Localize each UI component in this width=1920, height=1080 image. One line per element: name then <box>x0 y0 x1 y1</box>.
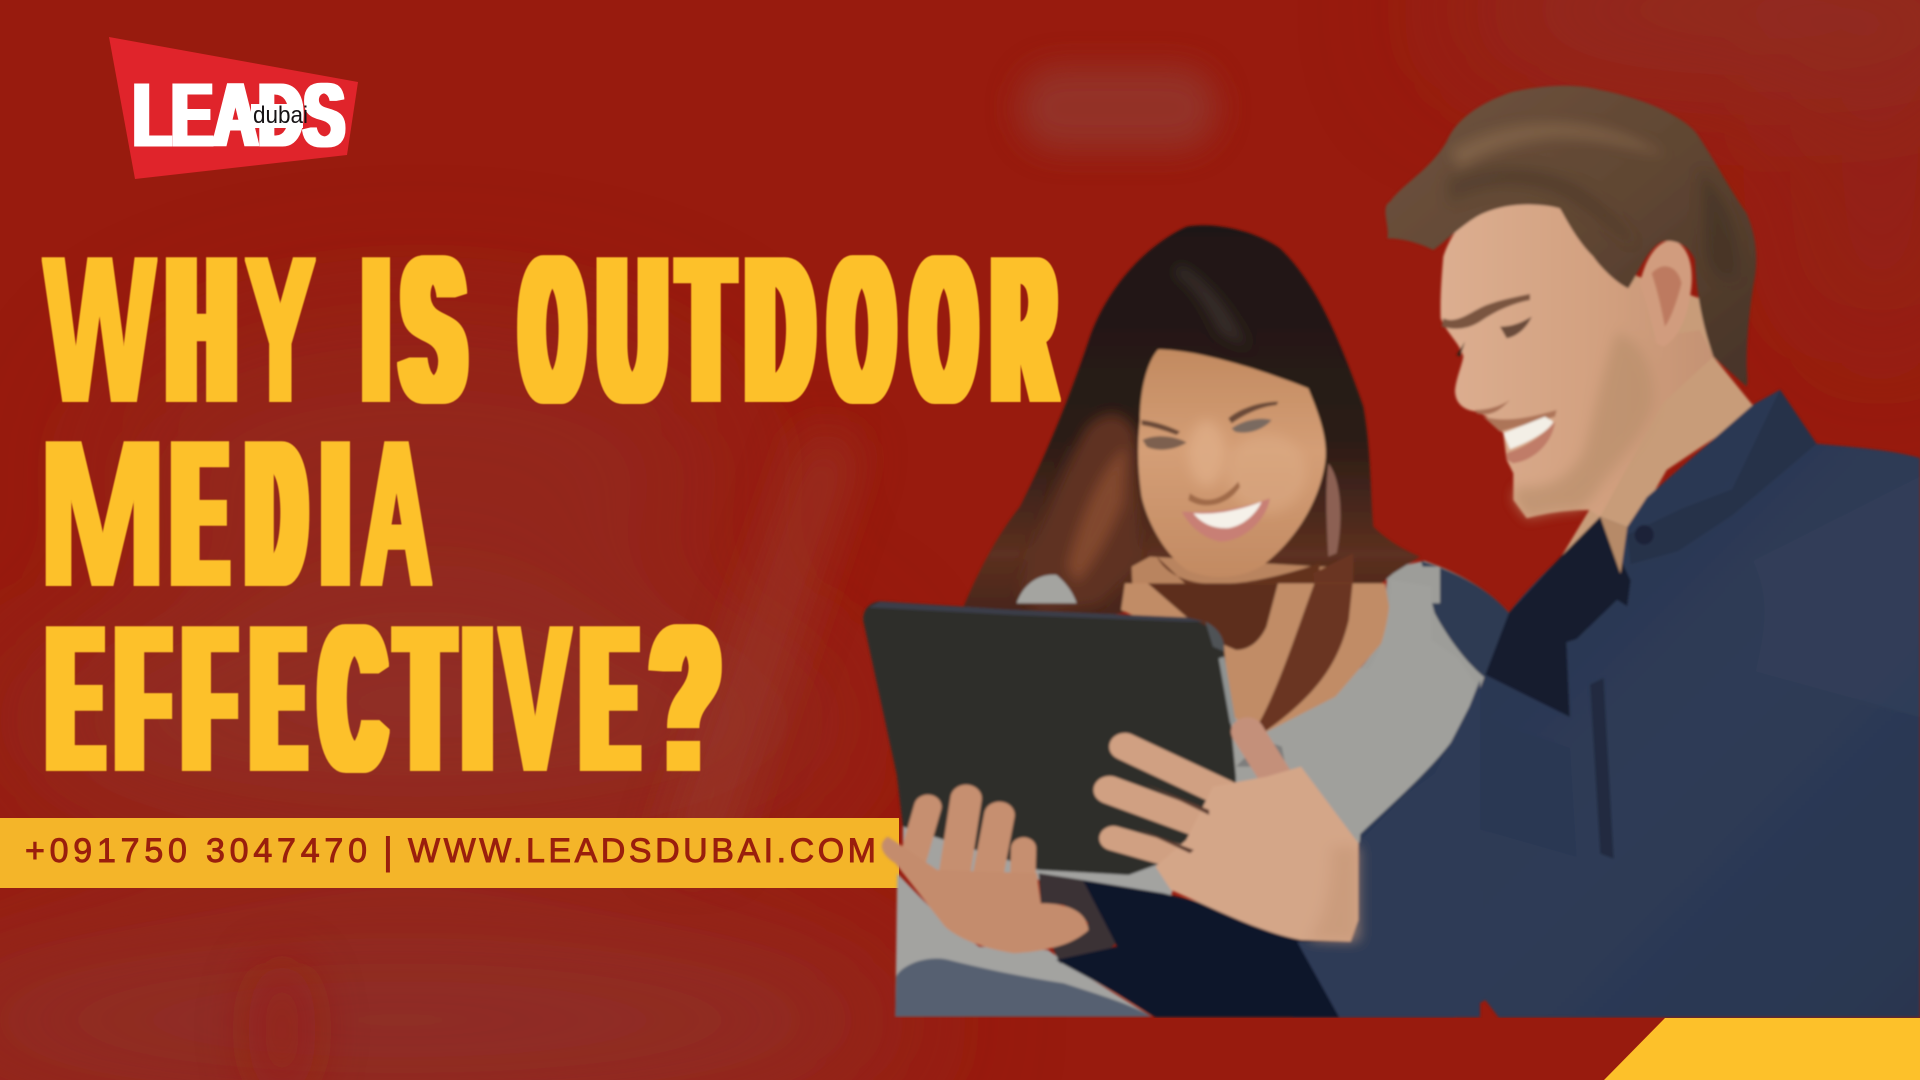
title: E <box>50 582 101 813</box>
woman torso <box>894 581 1390 1018</box>
woman <box>953 225 1509 837</box>
title: F <box>118 585 167 814</box>
logo: Leads Dubai: LEADS <box>133 66 345 166</box>
logo: Leads Dubai <box>109 37 358 179</box>
title: C <box>322 584 383 814</box>
title: D <box>249 397 304 628</box>
title: E <box>175 398 225 628</box>
photo: couple with tablet <box>863 86 1920 1018</box>
title: U <box>600 214 665 445</box>
title: A <box>362 400 431 629</box>
title: I <box>325 397 346 628</box>
title: E <box>584 583 636 813</box>
title: T <box>399 584 451 814</box>
title: F <box>186 583 233 813</box>
title: O <box>832 214 892 444</box>
contact strip <box>0 818 899 888</box>
title: M <box>38 398 167 629</box>
man <box>1293 270 1920 1018</box>
title: S <box>403 214 463 445</box>
title: T <box>681 215 731 445</box>
title: W <box>44 215 155 445</box>
contact strip: | <box>383 831 393 873</box>
title: H <box>169 214 234 445</box>
title: V <box>500 583 570 814</box>
contact strip: WWW.LEADSDUBAI.COM <box>408 832 876 870</box>
title: ? <box>652 583 719 813</box>
logo: Leads Dubai: dubai <box>253 102 308 129</box>
man's head <box>1385 86 1756 518</box>
left hand <box>882 798 1351 1017</box>
title: O <box>914 214 974 444</box>
title <box>38 213 1054 814</box>
tablet <box>863 601 1236 875</box>
yellow corner accent <box>1604 1018 1920 1080</box>
title: O <box>523 213 582 444</box>
title: E <box>254 583 302 814</box>
right hand <box>1110 680 1480 1017</box>
contact strip: +091750 3047470 <box>25 832 367 870</box>
title: R <box>994 215 1054 445</box>
title: D <box>748 215 812 445</box>
title: Y <box>247 215 314 445</box>
title: I <box>366 214 386 445</box>
title: I <box>465 583 490 814</box>
